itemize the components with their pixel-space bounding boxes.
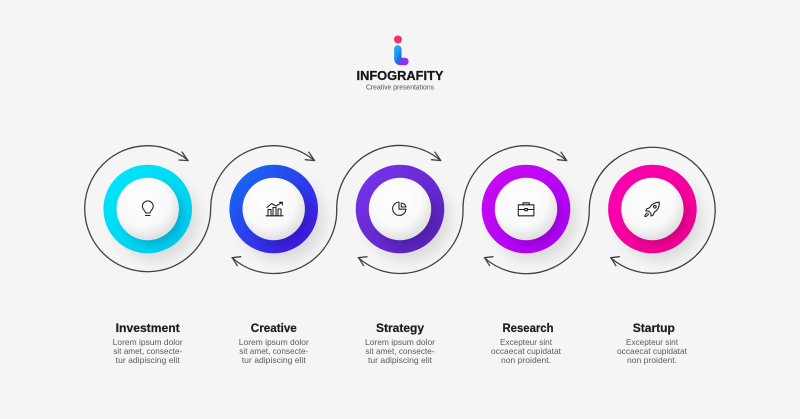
description: Lorem ipsum dolor	[113, 337, 183, 347]
description: tur adipiscing elit	[242, 355, 306, 365]
label: Creative	[239, 321, 309, 365]
icon: growth chart	[266, 202, 283, 216]
logo mark	[394, 36, 405, 62]
heading: Research	[502, 321, 554, 335]
description: tur adipiscing elit	[116, 355, 180, 365]
label: Investment	[113, 321, 183, 365]
description: Excepteur sint	[500, 337, 553, 347]
step 3 disc: Strategy	[356, 165, 450, 261]
arrow: step 3 to step 4	[358, 146, 567, 273]
description	[365, 337, 435, 365]
icon: rocket	[645, 202, 659, 217]
arrow: step 1 to step 2	[85, 146, 315, 272]
description	[239, 337, 309, 365]
description: Excepteur sint	[626, 337, 679, 347]
heading: Investment	[116, 321, 180, 335]
logo	[356, 36, 444, 92]
icon: pie chart	[393, 202, 406, 215]
step 1 disc: Investment	[103, 165, 198, 261]
description	[491, 337, 562, 365]
logo name: INFOGRAFITY	[356, 69, 444, 83]
description: non proident.	[501, 355, 551, 365]
description: Lorem ipsum dolor	[239, 337, 309, 347]
icon: briefcase	[518, 203, 534, 216]
heading: Strategy	[376, 321, 424, 335]
step 4 disc: Research	[482, 165, 576, 261]
logo tagline: Creative presentations	[366, 84, 434, 92]
description: sit amet, consecte-	[113, 346, 182, 356]
label: Strategy	[365, 321, 435, 365]
heading: Creative	[251, 321, 297, 335]
label: Startup	[617, 321, 688, 365]
description: sit amet, consecte-	[366, 346, 435, 356]
description	[617, 337, 688, 365]
icon: light bulb	[142, 201, 153, 216]
description	[113, 337, 183, 365]
description: tur adipiscing elit	[368, 355, 433, 365]
description: occaecat cupidatat	[491, 346, 562, 356]
description: non proident.	[627, 355, 677, 365]
description: occaecat cupidatat	[617, 346, 688, 356]
description: sit amet, consecte-	[239, 346, 308, 356]
step 2 disc: Creative	[229, 165, 324, 261]
description: Lorem ipsum dolor	[365, 337, 435, 347]
label: Research	[491, 321, 562, 365]
step 5 disc: Startup	[608, 165, 702, 261]
arrow: step 2 to step 3	[232, 145, 441, 273]
arrow: step 4 to step 5	[484, 147, 715, 274]
heading: Startup	[633, 321, 675, 335]
